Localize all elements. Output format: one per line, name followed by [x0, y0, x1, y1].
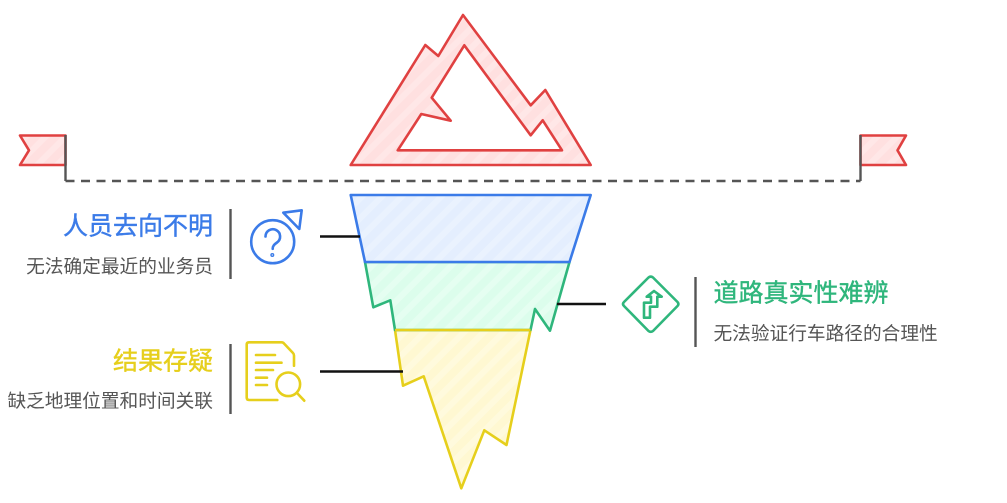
heading: personnel: 人员去向不明 — [63, 212, 213, 240]
text: road: 无法验证行车路径的合理性 — [714, 323, 938, 344]
connector: results — [320, 370, 403, 373]
icon: road sign — [623, 277, 678, 332]
iceberg layer: blue top — [351, 195, 591, 262]
text: results: 缺乏地理位置和时间关联 — [7, 390, 213, 412]
divider: results — [229, 344, 232, 414]
icon: document search — [247, 342, 304, 401]
iceberg layer: yellow bottom — [395, 330, 530, 488]
iceberg layer: green middle — [365, 262, 570, 331]
divider: personnel — [229, 209, 232, 279]
heading: results: 结果存疑 — [113, 348, 213, 376]
icon: person question — [251, 210, 302, 263]
heading: road: 道路真实性难辨 — [714, 280, 889, 308]
flag: left — [20, 135, 66, 181]
divider: road — [694, 277, 697, 347]
waterline dashed — [66, 180, 860, 182]
connector: personnel — [320, 235, 360, 238]
yellow top edge — [395, 329, 530, 331]
text: personnel: 无法确定最近的业务员 — [26, 256, 213, 277]
flag: right — [860, 135, 906, 181]
connector: road — [557, 303, 606, 305]
iceberg tip above water — [351, 15, 591, 165]
